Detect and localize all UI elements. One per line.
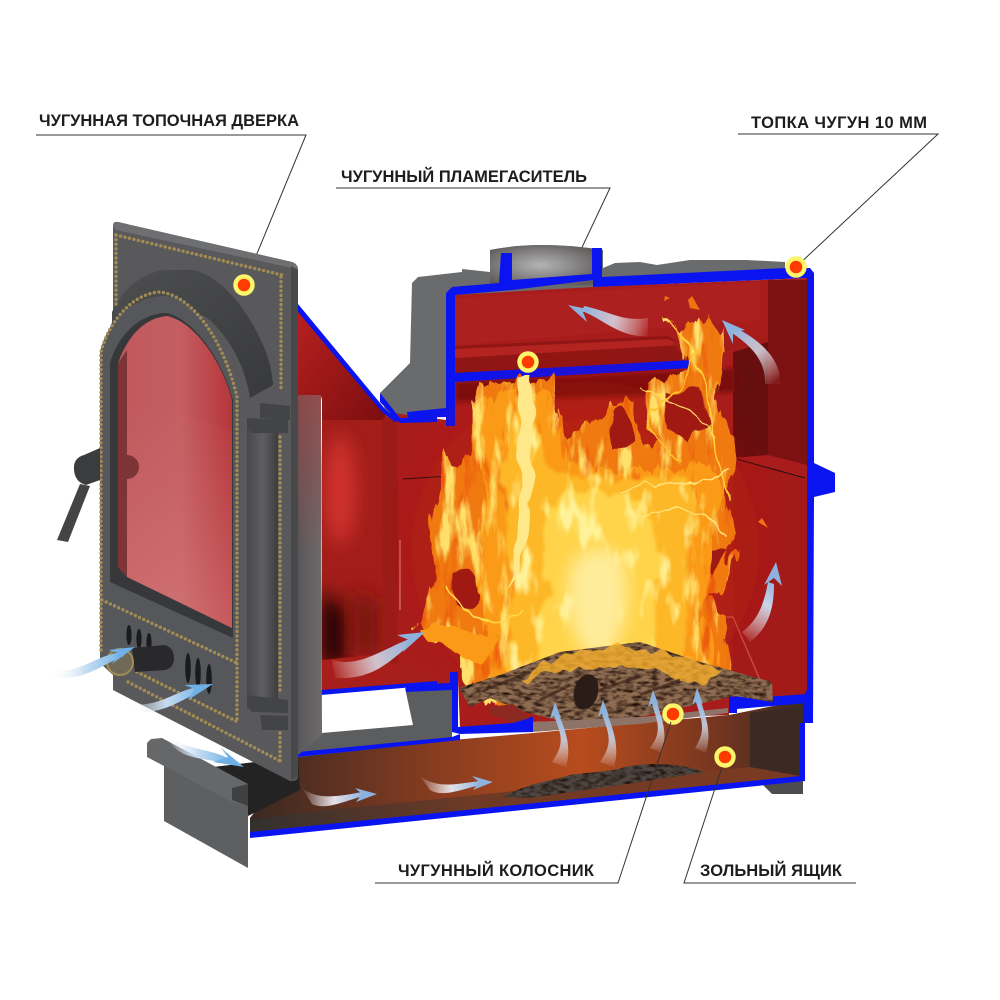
shade under arrester <box>455 368 735 402</box>
label: ash box: ЗОЛЬНЫЙ ЯЩИК <box>700 861 843 880</box>
grey base <box>298 688 452 755</box>
flue collar <box>490 245 602 285</box>
central streak <box>510 378 534 590</box>
fire glow <box>395 345 775 715</box>
ash door plate <box>147 738 248 868</box>
blue section outline <box>250 248 835 838</box>
plate body <box>164 765 248 868</box>
yellow flame <box>502 397 696 695</box>
fire <box>395 296 775 715</box>
hinge bar <box>247 418 278 708</box>
ash pan inner wall <box>250 700 803 836</box>
side wall <box>322 420 385 690</box>
label: cast iron grate <box>375 722 671 883</box>
glass lighter lower <box>127 400 232 628</box>
charred log <box>570 672 602 712</box>
ash pan floor <box>250 767 800 836</box>
firebox body <box>298 245 807 755</box>
arrow: grate 3 <box>648 690 664 753</box>
flying sparks <box>664 296 775 528</box>
arrow: vent 1 <box>50 647 135 678</box>
flame arrester tube <box>455 336 690 380</box>
ash pan right end <box>750 706 800 776</box>
top outline <box>446 253 690 426</box>
door side edge <box>298 395 322 755</box>
flames over logs <box>520 645 720 685</box>
arrow: grate 4 <box>692 688 708 753</box>
air intake arrows <box>50 647 244 767</box>
bright flame core <box>539 490 657 685</box>
window recess <box>110 313 233 638</box>
label: cast iron flame arrester: ЧУГУННЫЙ ПЛАМЕГАСИТЕЛЬ <box>341 167 587 186</box>
label: firebox cast iron 10 mm: ТОПКА ЧУГУН 10 ММ <box>751 114 927 132</box>
arrow: grate 1 <box>550 702 568 767</box>
upper hinge <box>247 403 290 433</box>
grey top casting <box>380 245 785 420</box>
marker: ash box <box>716 748 734 766</box>
door side edge fade <box>298 395 321 560</box>
label: firebox cast iron 10 mm <box>738 114 938 267</box>
vent knob <box>132 645 174 672</box>
raised arch <box>112 270 273 398</box>
side wall lower shade <box>350 590 380 655</box>
door plate <box>100 222 298 781</box>
arrow: right <box>742 562 782 642</box>
label: cast iron firebox door: ЧУГУННАЯ ТОПОЧНАЯ ДВЕРКА <box>39 112 299 130</box>
latch shadow on glass <box>127 455 139 479</box>
red interior <box>298 278 807 728</box>
air flow arrows <box>302 305 782 806</box>
dark gaps in flame <box>452 388 726 608</box>
glass left strip <box>118 350 127 577</box>
handle lever <box>57 484 90 542</box>
marker: firebox <box>788 258 804 276</box>
side wall lower red <box>322 652 450 692</box>
arrow: under door <box>165 735 244 767</box>
grate <box>488 704 728 732</box>
dark wedge under door <box>213 757 300 816</box>
rosette <box>107 649 133 675</box>
arrow: left <box>332 632 425 678</box>
right shelf <box>729 694 807 713</box>
wood shadow streaks <box>490 672 680 700</box>
arrow: ash left <box>302 788 377 806</box>
lower hinge <box>247 695 288 730</box>
hot centre <box>568 548 627 660</box>
top wedge of side wall <box>298 308 385 425</box>
plate top edge <box>113 222 298 270</box>
flame tongue left <box>420 625 498 665</box>
logs <box>459 642 773 722</box>
side wall bright glow <box>324 435 356 545</box>
plate right edge <box>291 266 298 781</box>
right wall upper <box>768 280 807 465</box>
door glass <box>118 316 232 628</box>
upper chamber highlight <box>455 282 760 345</box>
door <box>57 222 322 781</box>
arrow: vent 2 <box>130 684 213 712</box>
lower left outline <box>321 672 533 734</box>
marker: door <box>236 276 252 294</box>
arrow: ash centre <box>420 776 493 793</box>
vent slots <box>126 625 212 694</box>
orange flame <box>477 388 723 700</box>
flange corner <box>232 784 248 806</box>
handle knob <box>74 448 100 485</box>
label: ash box <box>684 767 856 883</box>
outer flame <box>415 315 736 705</box>
right wall lower <box>733 458 807 697</box>
rear tube <box>672 336 778 352</box>
label: cast iron grate: ЧУГУННЫЙ КОЛОСНИК <box>398 861 595 880</box>
plate flange <box>147 738 248 806</box>
label: cast iron flame arrester <box>336 167 610 362</box>
diagonal edge <box>298 304 400 422</box>
gold studs <box>101 235 282 762</box>
right foot <box>762 781 803 794</box>
grate block <box>624 706 642 717</box>
arrow: grate 2 <box>598 700 616 767</box>
wood pile <box>459 642 773 722</box>
label: cast iron firebox door <box>36 112 306 285</box>
floor seam <box>600 617 760 680</box>
ash pile <box>503 764 705 798</box>
side wall dark patch <box>322 590 345 665</box>
arrow: top right <box>722 320 780 384</box>
pillar <box>383 418 398 665</box>
marker: grate <box>664 706 682 722</box>
arrow: top <box>568 305 648 336</box>
ash pan outline <box>250 723 805 838</box>
marker: flame arrester <box>520 354 536 370</box>
flame wisps <box>450 320 730 623</box>
rear seam <box>403 458 805 479</box>
door front face <box>100 296 240 722</box>
small flange <box>380 393 446 423</box>
ash pan <box>213 700 803 836</box>
base line <box>298 734 460 757</box>
white gap under firebox <box>322 688 413 733</box>
